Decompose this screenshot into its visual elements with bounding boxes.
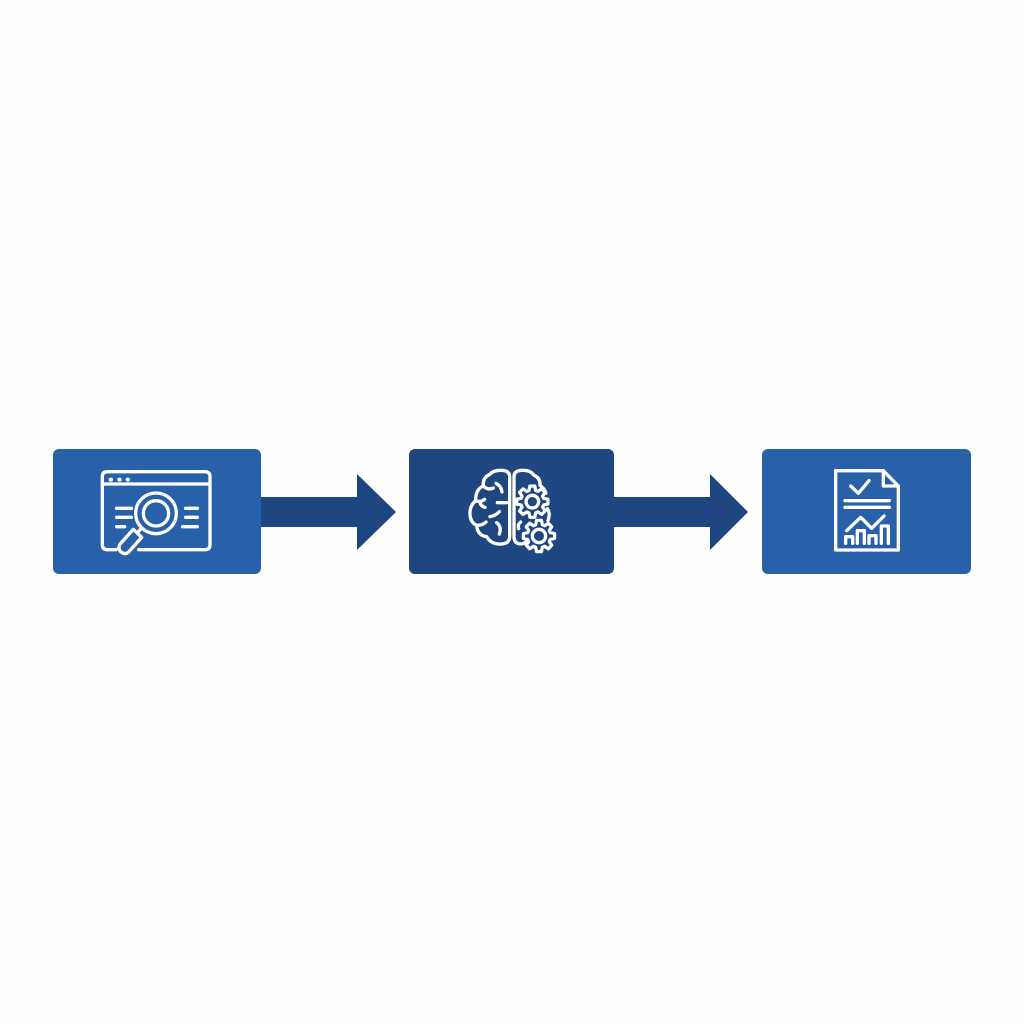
panel: processing step — [409, 449, 614, 574]
arrow: first step to second step — [261, 474, 396, 550]
icon: brain with gears — [470, 470, 555, 552]
icon: browser window with magnifying glass — [102, 472, 210, 554]
panel: report step — [762, 449, 971, 574]
arrow: second step to third step — [614, 474, 748, 550]
panel: search step — [53, 449, 261, 574]
icon: report document with chart — [836, 471, 898, 550]
